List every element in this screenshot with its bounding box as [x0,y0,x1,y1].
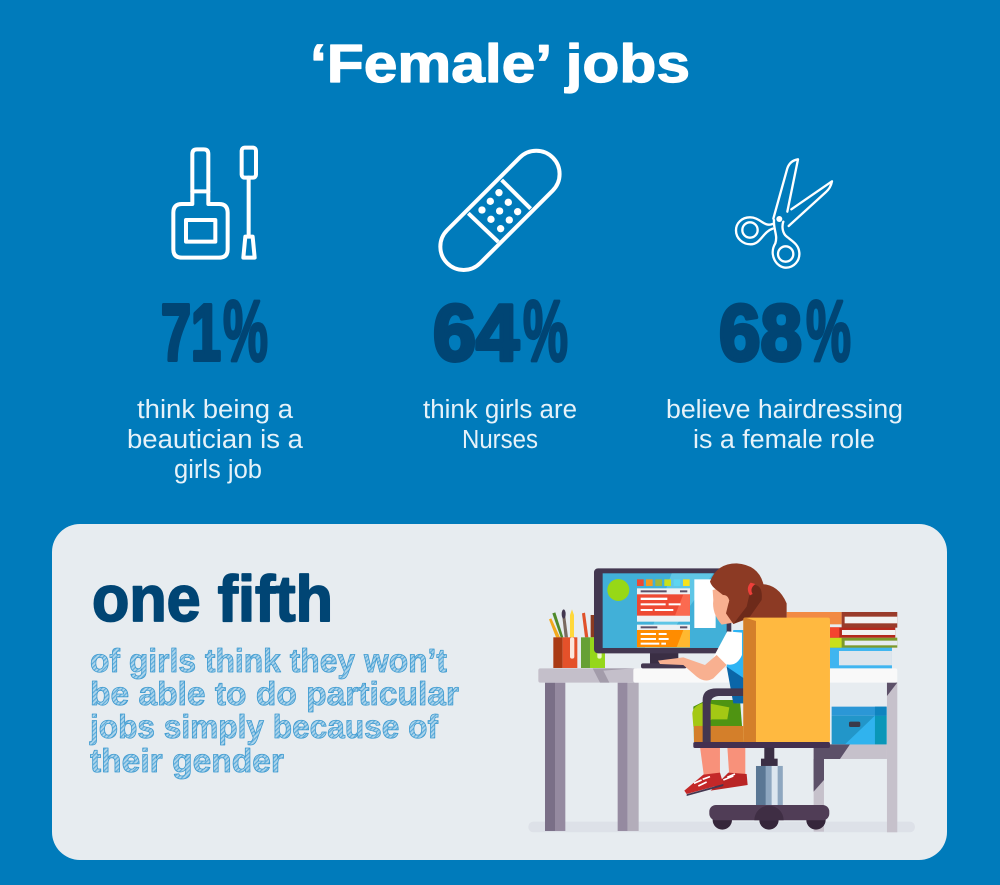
text: nurse caption: Nurses [462,426,538,454]
text: beautician caption: beautician is a [127,426,304,454]
panel: one fifth [52,524,947,860]
text: beautician caption [127,396,304,484]
percentage: 68% [719,284,851,380]
percentage: 71%: % [223,284,268,380]
icon: scissors [736,159,832,268]
text: beautician caption: girls job [174,456,262,484]
text: nurse caption: think girls are [423,396,577,424]
panel: beautician statistic [127,148,304,484]
pencil pots [549,609,605,668]
percentage: 71%: 71 [161,288,221,377]
arm [658,655,727,680]
office chair [693,618,830,830]
legs and shoes [700,747,720,777]
shorts [693,700,743,742]
text: girls gender statement: jobs simply because of [89,708,439,745]
panel: nurse statistic [423,141,577,454]
percentage: 68%: 68 [719,288,802,377]
text: girls gender statement: of girls think they won’t [90,642,447,679]
text: girls gender statement: their gender [90,742,284,779]
storage box [832,707,887,744]
overalls and shirt [727,630,747,703]
text: beautician caption: think being a [137,396,294,424]
title: ‘Female’ jobs [310,34,690,94]
text: hairdressing caption: believe hairdressing [666,396,903,424]
percentage: 64%: % [523,284,568,380]
text: hairdressing caption [666,396,903,454]
girl [658,563,787,796]
icon: nail polish and brush [173,148,256,258]
head and hair [713,585,733,625]
text: girls gender statement: be able to do particular [90,675,459,712]
panel: hairdressing statistic [666,159,903,454]
text: nurse caption [423,396,577,454]
text: hairdressing caption: is a female role [693,426,875,454]
desk [538,668,897,832]
percentage: 64%: 64 [433,288,519,377]
icon: bandage [431,141,569,280]
text: girls gender statement [89,642,459,779]
computer monitor [594,568,731,668]
floor shadow [528,822,915,832]
heading: one fifth: one fifth [92,562,333,635]
books [787,612,897,668]
percentage: 68%: % [806,284,851,380]
percentage: 64% [433,284,568,380]
illustration: girl at computer desk [528,563,915,832]
